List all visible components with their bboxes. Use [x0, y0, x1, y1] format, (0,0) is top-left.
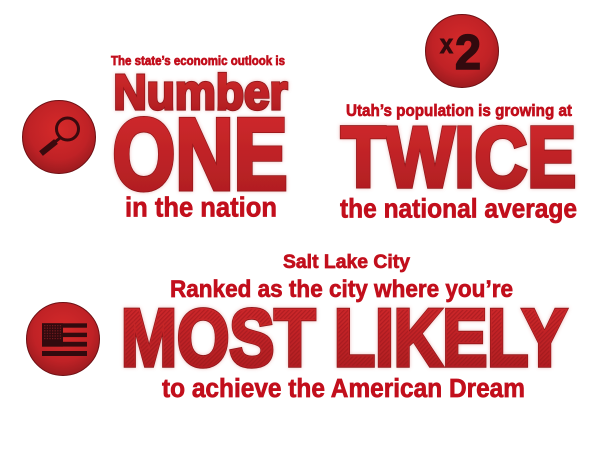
panel: twice — [340, 14, 577, 224]
icon: magnifying glass badge — [22, 100, 96, 174]
text: the national average: the national average — [340, 194, 577, 224]
icon: times two badge: 2 — [455, 26, 481, 80]
text: outlook intro: The state’s economic outlook is — [111, 54, 285, 68]
icon: times two badge — [426, 14, 498, 88]
icon: american flag badge — [26, 302, 100, 376]
heading: ONE: ONE — [112, 99, 288, 211]
panel: most likely — [26, 251, 567, 403]
text: ranked line: Ranked as the city where you’re — [170, 276, 513, 303]
text: in the nation: in the nation — [125, 192, 277, 222]
icon: times two badge: x — [440, 29, 453, 59]
heading: Number: Number — [114, 65, 288, 120]
panel: number one — [22, 54, 288, 222]
text: Salt Lake City: Salt Lake City — [283, 251, 410, 273]
text: american dream: to achieve the American Dream — [162, 375, 525, 403]
heading: ONE: ONE — [112, 99, 288, 211]
text: population intro: Utah’s population is growing at — [346, 101, 572, 120]
heading: Number: Number — [114, 65, 288, 120]
